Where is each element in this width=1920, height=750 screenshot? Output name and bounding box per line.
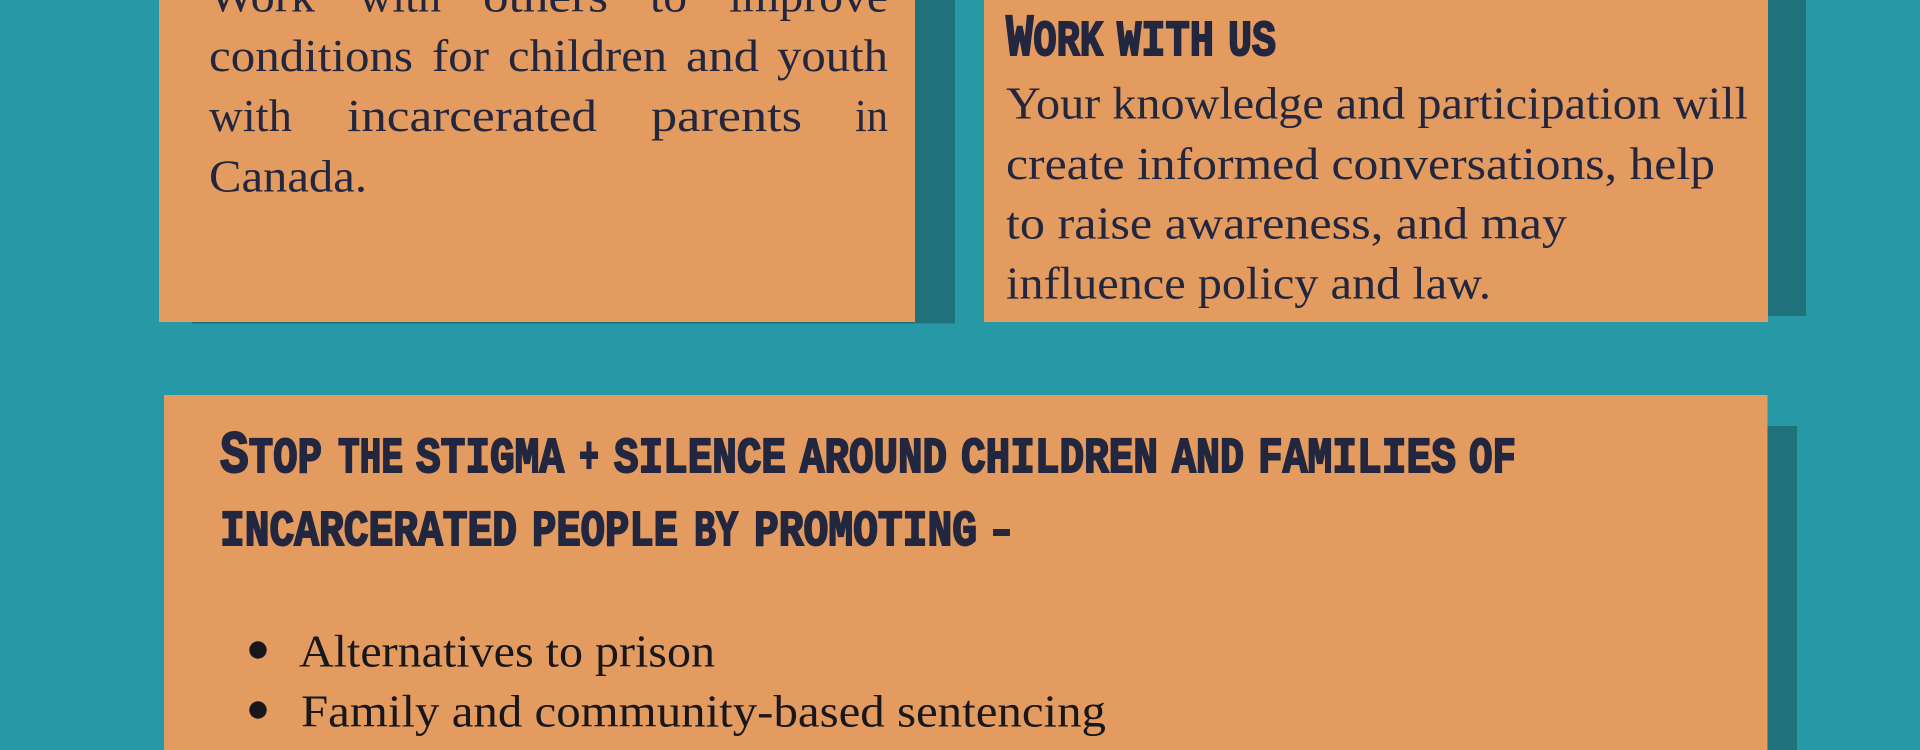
heading: work with us: WITH	[1117, 14, 1214, 71]
text block: work with others: and	[686, 30, 759, 81]
heading: work with us: WORK	[1006, 6, 1103, 73]
text block: work with others: for	[432, 30, 489, 81]
text block: work with others: in	[855, 90, 888, 141]
panel: work with others	[159, 0, 955, 324]
text block: work with us body: influence policy and law.	[1006, 258, 1491, 308]
text block: work with us body: create informed conversations, help	[1006, 138, 1715, 189]
heading: stop the stigma: AND	[1172, 431, 1244, 488]
bullet list	[249, 626, 1106, 736]
text block: work with us body: Your knowledge and participation will	[1006, 78, 1748, 128]
heading: stop the stigma: STOP	[220, 423, 322, 490]
text block: work with us body	[1006, 78, 1748, 308]
text block: work with others: parents	[651, 90, 802, 141]
panel: work with us	[984, 0, 1806, 322]
heading: stop the stigma	[220, 423, 1516, 561]
heading: stop the stigma: THE	[338, 431, 403, 488]
text block: work with us body: to raise awareness, and may	[1006, 198, 1567, 248]
heading: stop the stigma: +	[579, 431, 599, 488]
heading: stop the stigma: BY	[694, 504, 738, 561]
heading: stop the stigma: CHILDREN	[961, 431, 1158, 488]
bullet list: Alternatives to prison	[299, 626, 715, 676]
text block: work with others	[209, 0, 888, 202]
panel: stop the stigma	[164, 395, 1797, 750]
heading: stop the stigma: FAMILIES	[1258, 431, 1456, 488]
text block: work with others: youth	[777, 30, 888, 81]
text block: work with others: incarcerated	[347, 90, 597, 141]
heading: stop the stigma: STIGMA	[416, 431, 564, 488]
heading: work with us: US	[1228, 14, 1276, 71]
text block: work with others: with	[209, 90, 292, 141]
text block: work with others: conditions	[209, 30, 413, 81]
heading: stop the stigma: –	[991, 504, 1012, 561]
text block: work with others: children	[508, 30, 667, 81]
heading: work with us	[1006, 6, 1276, 73]
heading: stop the stigma: OF	[1469, 431, 1516, 488]
bullet list: Family and community-based sentencing	[301, 686, 1106, 736]
heading: stop the stigma: INCARCERATED	[220, 504, 517, 561]
heading: stop the stigma: AROUND	[800, 431, 947, 488]
heading: stop the stigma: SILENCE	[614, 431, 786, 488]
heading: stop the stigma: PEOPLE	[532, 504, 678, 561]
text block: work with others: Canada.	[209, 150, 367, 202]
heading: stop the stigma: PROMOTING	[754, 504, 977, 561]
